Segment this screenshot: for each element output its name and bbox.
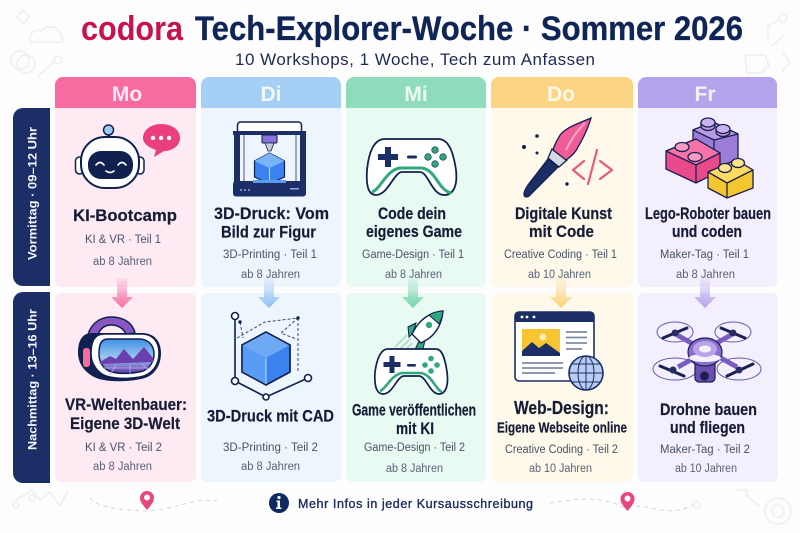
info text: Mehr Infos in jeder Kursausschreibung: [298, 497, 533, 511]
day header: Fr: [638, 77, 777, 108]
age: ab 10 Jahren: [528, 269, 591, 281]
panel: Web-Design: [491, 293, 633, 482]
column: Dienstag: [201, 77, 341, 482]
heading: Eigene Webseite online: [497, 420, 627, 437]
heading: [366, 204, 462, 241]
day header: Do: Do: [547, 83, 575, 106]
time label: afternoon: Nachmittag · 13–16 Uhr: [26, 309, 40, 450]
footer: [140, 491, 634, 513]
panel: Game veröffentlichen mit KI: [346, 293, 486, 482]
icon: right map pin: [620, 492, 634, 511]
title: [81, 10, 743, 48]
age: ab 8 Jahren: [93, 256, 152, 268]
age: ab 8 Jahren: [241, 269, 300, 281]
day header: Mo: [55, 77, 196, 108]
heading: und coden: [672, 222, 742, 241]
arrow: Mi: [402, 278, 424, 308]
arrow: Do: [550, 278, 572, 308]
heading: 3D-Druck: Vom: [214, 204, 329, 223]
topic: 3D-Printing · Teil 1: [223, 249, 317, 261]
topic: Creative Coding · Teil 1: [504, 249, 617, 261]
heading: [645, 204, 771, 241]
heading: VR-Weltenbauer:: [65, 395, 187, 414]
icon: browser window and globe: [515, 312, 603, 390]
topic: Game-Design · Teil 1: [362, 249, 464, 261]
day header: Mi: [346, 77, 486, 108]
event title: Tech-Explorer-Woche · Sommer 2026: [195, 10, 743, 48]
age: ab 8 Jahren: [385, 269, 442, 281]
day header: Di: [201, 77, 341, 108]
heading: eigenes Game: [366, 222, 462, 241]
arrow: Di: [258, 278, 280, 308]
heading: [660, 400, 757, 437]
age: ab 8 Jahren: [93, 461, 152, 473]
age: ab 10 Jahren: [529, 463, 592, 475]
icon: paintbrush and code: [522, 118, 612, 197]
day header: Mi: Mi: [404, 83, 428, 106]
age: ab 8 Jahren: [676, 269, 735, 281]
panel: Code dein eigenes Game: [346, 108, 486, 287]
panel: KI-Bootcamp: [55, 108, 196, 287]
time label: afternoon: [13, 292, 50, 483]
icon: drone: [653, 322, 761, 382]
heading: Drohne bauen: [660, 400, 757, 419]
heading: 3D-Druck mit CAD: [207, 406, 334, 426]
topic: Maker-Tag · Teil 1: [660, 249, 749, 261]
column: Montag: [55, 77, 196, 482]
subtitle: 10 Workshops, 1 Woche, Tech zum Anfassen: [235, 50, 595, 69]
heading: [65, 395, 187, 433]
heading: Code dein: [378, 204, 446, 223]
heading: Bild zur Figur: [221, 222, 316, 242]
panel: Lego-Roboter: [638, 108, 777, 287]
column: Donnerstag: [491, 77, 633, 482]
topic: Creative Coding · Teil 2: [505, 444, 618, 456]
heading: mit Code: [529, 222, 594, 241]
panel: VR-Weltenbauer: [55, 293, 196, 482]
heading: Digitale Kunst: [515, 204, 612, 223]
day header: Di: Di: [260, 83, 282, 106]
heading: KI-Bootcamp: [73, 206, 177, 225]
heading: Web-Design:: [514, 398, 609, 418]
day header: Do: [491, 77, 633, 108]
topic: KI & VR · Teil 2: [85, 442, 162, 454]
icon: left map pin: [140, 491, 154, 510]
icon: rocket and controller: [375, 311, 448, 394]
icon: 3D printer: [233, 122, 306, 196]
icon: game controller: [367, 139, 456, 195]
age: ab 8 Jahren: [241, 461, 300, 473]
panel: 3D-Druck Bild zur Figur: [201, 108, 341, 287]
heading: [497, 398, 627, 437]
icon: building bricks: [666, 118, 753, 198]
panel: Digitale Kunst mit Code: [491, 108, 633, 287]
column: Freitag: [638, 77, 778, 482]
heading: Game veröffentlichen: [352, 400, 476, 420]
day header: Fr: Fr: [694, 83, 716, 106]
icon: CAD cube: [232, 312, 312, 400]
topic: Game-Design · Teil 2: [364, 442, 465, 454]
arrow: Fr: [694, 278, 716, 308]
time label: morning: [13, 108, 50, 286]
icon: robot with speech bubble: [76, 124, 180, 188]
time label: morning: Vormittag · 09–12 Uhr: [26, 127, 40, 260]
column: Mittwoch: [346, 77, 486, 482]
panel: 3D-Druck mit CAD: [201, 293, 341, 482]
topic: 3D-Printing · Teil 2: [223, 442, 318, 454]
panel: Drohne: [638, 293, 778, 482]
icon: VR headset: [78, 317, 161, 381]
heading: Eigene 3D-Welt: [70, 414, 180, 433]
heading: mit KI: [396, 419, 434, 438]
heading: [515, 204, 612, 241]
topic: Maker-Tag · Teil 2: [660, 444, 750, 456]
day header: Mo: Mo: [112, 83, 142, 106]
age: ab 8 Jahren: [386, 463, 443, 475]
brand name: codora: [81, 10, 184, 48]
arrow: Mo: [111, 278, 133, 308]
age: ab 10 Jahren: [675, 463, 737, 475]
topic: KI & VR · Teil 1: [85, 234, 161, 246]
heading: [352, 400, 476, 438]
heading: [214, 204, 329, 242]
icon: info: [269, 493, 289, 513]
heading: und fliegen: [670, 418, 745, 437]
